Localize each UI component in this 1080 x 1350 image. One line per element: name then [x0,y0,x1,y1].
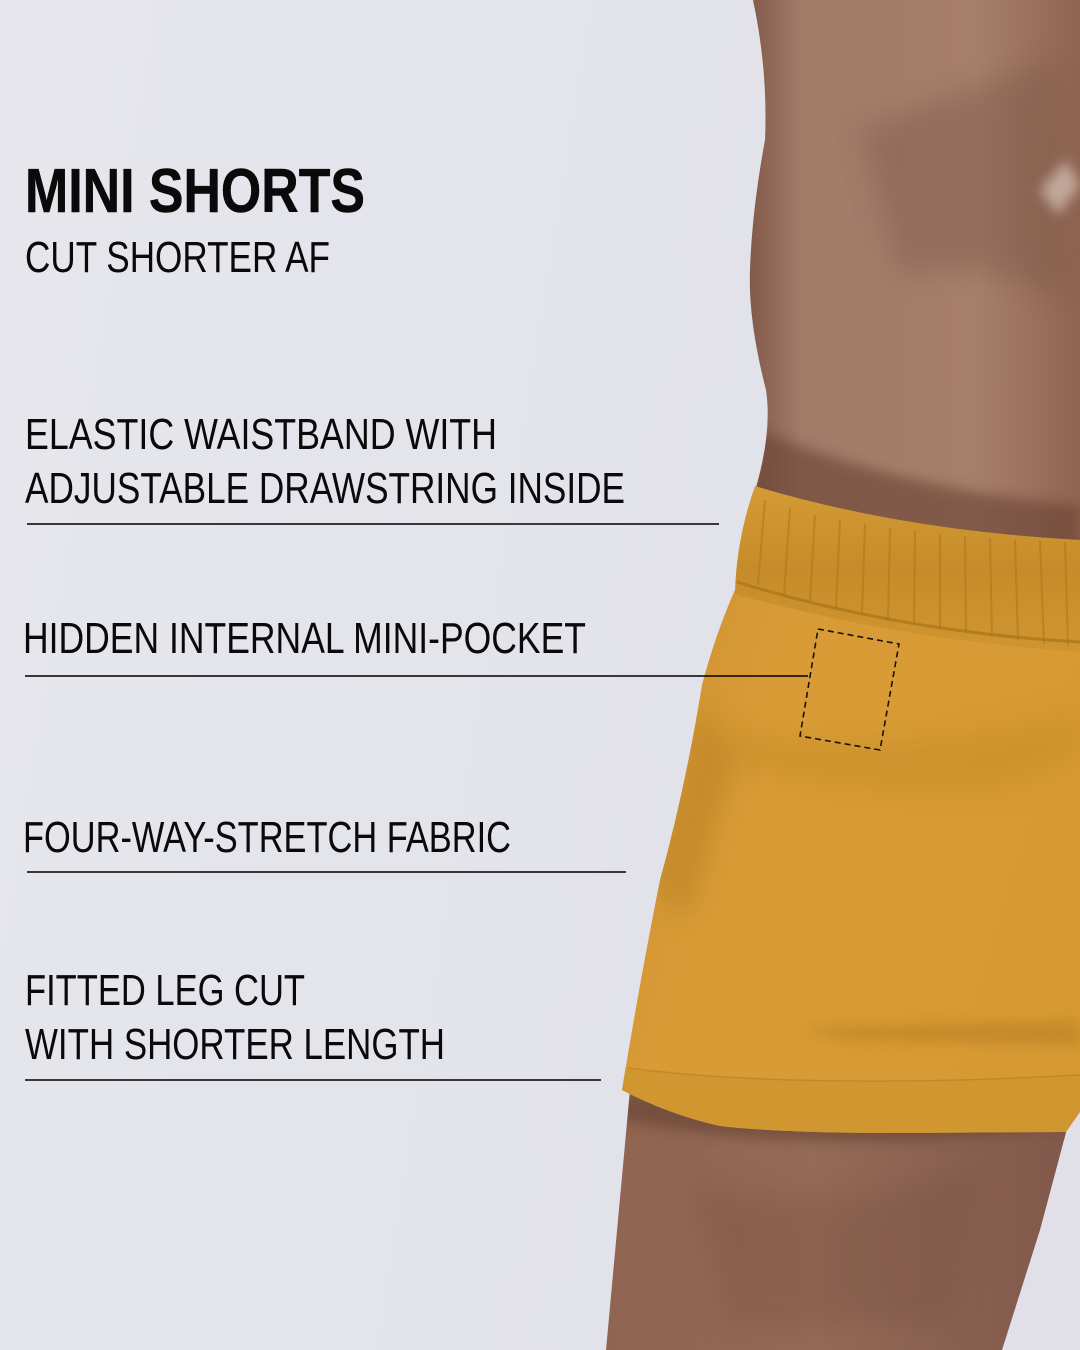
callout: fitted leg cut: WITH SHORTER LENGTH [25,1020,445,1069]
callout: elastic waistband: ADJUSTABLE DRAWSTRING INSIDE [25,464,625,513]
shorts waistband [735,486,1080,652]
photo: model torso [740,0,1080,570]
callout: fitted leg cut: FITTED LEG CUT [25,966,305,1015]
icon: dashed pocket outline [800,629,899,750]
callout: hidden pocket: HIDDEN INTERNAL MINI-POCKET [23,614,586,663]
title: MINI SHORTS [25,157,365,226]
callout: fitted leg cut [25,966,601,1080]
shorts body [610,580,1080,1140]
callout: four-way stretch: FOUR-WAY-STRETCH FABRIC [23,813,511,862]
photo: mustard mini shorts [610,486,1080,1140]
shorts hem [622,1068,1080,1133]
callout: elastic waistband [25,410,719,524]
callout: elastic waistband: ELASTIC WAISTBAND WITH [25,410,497,459]
subtitle: CUT SHORTER AF [25,233,330,282]
photo: model thigh [600,1085,1080,1350]
